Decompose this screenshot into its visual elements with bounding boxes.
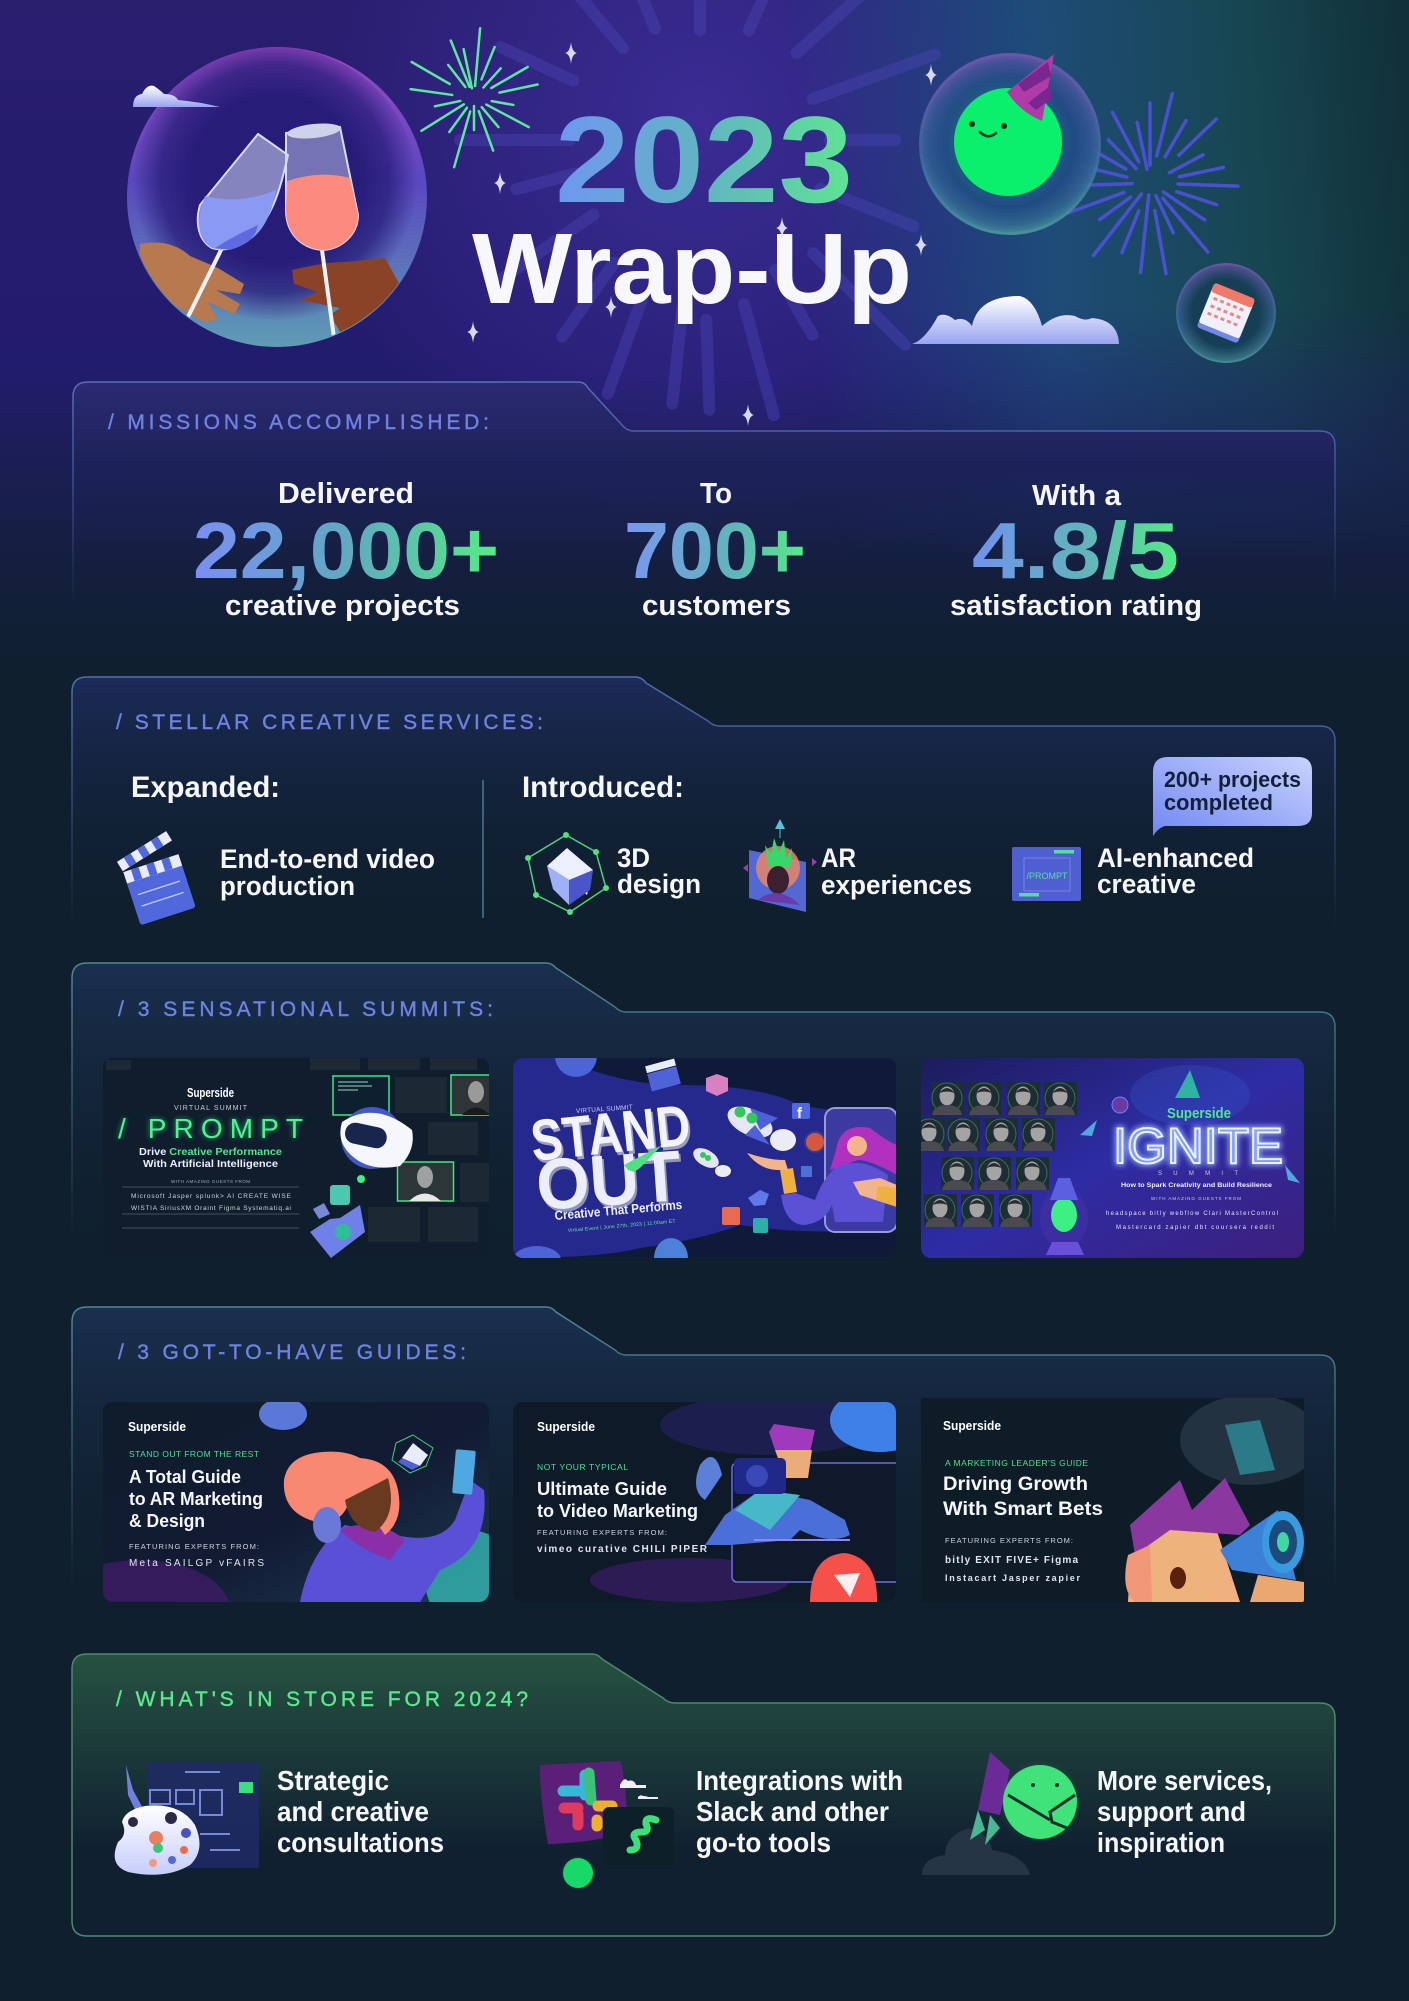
- card: AR guide: & Design: [129, 1511, 205, 1531]
- panel: missions accomplished: [73, 382, 1335, 622]
- big cloud: [912, 296, 1119, 344]
- card: video guide: NOT YOUR TYPICAL: [537, 1462, 628, 1472]
- card: AR guide: Meta SAILGP vFAIRS: [129, 1558, 264, 1569]
- text: more services: [1097, 1765, 1272, 1858]
- panel: stellar creative services: [72, 677, 1335, 930]
- card: stand out summit: OUT: [536, 1139, 686, 1229]
- title: 2023: 2023: [555, 92, 853, 229]
- card: ignite summit: IGNITE: [1113, 1118, 1283, 1174]
- stat: 22,000+ creative projects: [193, 478, 499, 622]
- card: stand out summit: f: [797, 1105, 803, 1122]
- card: AR guide: Superside: [128, 1419, 186, 1434]
- party hat: [1007, 54, 1054, 121]
- text: design: design: [617, 869, 701, 899]
- card: AR guide: to AR Marketing: [129, 1489, 263, 1509]
- text: end-to-end video: End-to-end video: [220, 844, 435, 874]
- stat: 4.8/5 satisfaction rating: 4.8/5: [972, 506, 1179, 595]
- card: prompt summit: WISTIA SiriusXM Oraint Figma Systematiq.ai: [131, 1205, 291, 1212]
- text: strategic and creative consultations: Strategic: [277, 1765, 389, 1796]
- heading: / 3 SENSATIONAL SUMMITS:: [118, 998, 493, 1021]
- card: video guide: vimeo curative CHILI PIPER: [537, 1544, 708, 1555]
- right glass: [286, 121, 358, 345]
- card: stand out summit: Creative That Performs: [554, 1197, 683, 1223]
- card: video guide: FEATURING EXPERTS FROM:: [537, 1528, 667, 1537]
- text: integrations: go-to tools: [696, 1827, 831, 1858]
- pirate: [1128, 1525, 1240, 1602]
- text: more services: support and: [1097, 1796, 1246, 1827]
- icon: AI creative card: [1012, 847, 1081, 901]
- sparkles: [467, 42, 937, 426]
- card: video guide: to Video Marketing: [537, 1501, 698, 1521]
- icon: AI creative card: /PROMPT: [1026, 871, 1068, 881]
- stat: 4.8/5 satisfaction rating: satisfaction rating: [950, 590, 1202, 622]
- stat: 700+ customers: [624, 478, 806, 622]
- divider: [482, 780, 484, 918]
- card: prompt summit: [103, 1058, 491, 1258]
- card: pirate guide: bitly EXIT FIVE+ Figma: [945, 1555, 1078, 1566]
- card: ignite summit: Mastercard zapier dbt coursera reddit: [1116, 1225, 1274, 1231]
- panel: what's in store for 2024: [72, 1654, 1335, 1936]
- card: prompt summit: With Artificial Intelligence: [143, 1158, 278, 1170]
- card: prompt summit: Drive Creative Performance: [139, 1146, 282, 1158]
- heading: / STELLAR CREATIVE SERVICES:: [116, 711, 543, 734]
- card: AR guide: STAND OUT FROM THE REST: [129, 1449, 259, 1459]
- card: ignite summit: headspace bitly webflow Clari MasterControl: [1106, 1211, 1278, 1217]
- panel: sensational summits: [72, 963, 1335, 1278]
- title: [472, 92, 912, 325]
- card: prompt summit: WITH AMAZING GUESTS FROM: [171, 1179, 250, 1184]
- card: ignite summit: IGNITE: [1113, 1118, 1283, 1174]
- stat: 700+ customers: 700+: [624, 506, 806, 595]
- card: prompt summit: / PROMPT: [118, 1113, 303, 1144]
- stat: 700+ customers: To: [700, 478, 732, 510]
- card: stand out summit: STAND: [530, 1096, 695, 1177]
- card: prompt summit: Superside: [187, 1085, 234, 1100]
- card: pirate guide: Driving Growth: [943, 1474, 1088, 1495]
- card: AR guide: [103, 1402, 489, 1602]
- text: strategic and creative consultations: [277, 1765, 444, 1858]
- card: pirate guide: With Smart Bets: [943, 1499, 1103, 1520]
- icon: 3D cube: [525, 832, 609, 915]
- text: strategic and creative consultations: consultations: [277, 1827, 444, 1858]
- text: 3D: 3D: [617, 843, 650, 873]
- small cloud: [133, 86, 220, 107]
- blue firework: [1060, 94, 1238, 274]
- card: video guide: Ultimate Guide: [537, 1479, 667, 1499]
- icon: clapperboard: [113, 830, 196, 926]
- text: integrations: Integrations with: [696, 1765, 903, 1796]
- green firework: [411, 28, 538, 167]
- card: prompt summit: / PROMPT: [118, 1113, 303, 1144]
- text: AI-enhanced: AI-enhanced: [1097, 843, 1254, 873]
- card: stand out summit: VIRTUAL SUMMIT: [576, 1104, 633, 1115]
- card: video guide: [513, 1402, 896, 1602]
- card: ignite summit: How to Spark Creativity and Build Resilience: [1121, 1182, 1272, 1189]
- card: stand out summit: Virtual Event | June 27th, 2023 | 11:00am ET: [568, 1219, 676, 1234]
- card: pirate guide: A MARKETING LEADER'S GUIDE: [945, 1458, 1088, 1468]
- person: [300, 1480, 485, 1602]
- card: prompt summit: Microsoft Jasper splunk> AI CREATE WISE: [131, 1193, 292, 1200]
- left hand: [138, 242, 244, 322]
- right hand: [292, 258, 399, 332]
- text: creative: creative: [1097, 869, 1196, 899]
- stat: 4.8/5 satisfaction rating: With a: [1032, 480, 1122, 512]
- card: pirate guide: [921, 1395, 1320, 1602]
- card: pirate guide: FEATURING EXPERTS FROM:: [945, 1536, 1073, 1545]
- callout: 200+ projects completed: [1153, 757, 1312, 836]
- panel: got-to-have guides: [71, 1306, 1336, 1602]
- illustration: toasting glasses bubble: [127, 47, 427, 347]
- left glass: [184, 134, 288, 325]
- card: ignite summit: SUMMIT: [1158, 1171, 1238, 1177]
- large background firework: [460, 0, 935, 415]
- card: ignite summit: [913, 1058, 1304, 1258]
- text: AR: AR: [821, 843, 856, 873]
- stat: 22,000+ creative projects: creative projects: [225, 590, 460, 622]
- icon: palette and flowchart: [115, 1762, 259, 1875]
- text: production: production: [220, 871, 355, 901]
- text: experiences: experiences: [821, 870, 972, 900]
- card: ignite summit: WITH AMAZING GUESTS FROM: [1151, 1196, 1241, 1201]
- subheading: introduced: Introduced:: [522, 771, 684, 804]
- heading: / WHAT'S IN STORE FOR 2024?: [116, 1688, 528, 1711]
- icon: AR portrait: [743, 819, 817, 912]
- card: AR guide: FEATURING EXPERTS FROM:: [129, 1542, 259, 1551]
- stat: 700+ customers: customers: [642, 590, 791, 622]
- heading: / 3 GOT-TO-HAVE GUIDES:: [118, 1341, 466, 1364]
- subheading: expanded: Expanded:: [131, 771, 280, 804]
- text: more services: inspiration: [1097, 1827, 1225, 1858]
- text: strategic and creative consultations: and creative: [277, 1796, 429, 1827]
- card: stand out summit: STAND: [528, 1093, 693, 1174]
- card: prompt summit: VIRTUAL SUMMIT: [174, 1105, 248, 1112]
- page background: [0, 0, 1409, 618]
- card: ignite summit: Superside: [1167, 1105, 1231, 1122]
- stat: 22,000+ creative projects: 22,000+: [193, 506, 499, 595]
- card: pirate guide: Instacart Jasper zapier: [945, 1573, 1080, 1583]
- stat: 4.8/5 satisfaction rating: [950, 480, 1202, 622]
- heading: / MISSIONS ACCOMPLISHED:: [108, 411, 489, 434]
- portraits grid: [913, 1082, 1077, 1227]
- illustration: green character with party hat: [919, 53, 1101, 235]
- card: stand out summit: OUT: [534, 1136, 684, 1226]
- card: AR guide: A Total Guide: [129, 1467, 241, 1487]
- illustration: calendar bubble: [1176, 263, 1276, 363]
- text: integrations: [696, 1765, 903, 1858]
- callout: 200+ projects completed: 200+ projects: [1164, 767, 1301, 792]
- stat: 22,000+ creative projects: Delivered: [278, 478, 414, 510]
- text: more services: More services,: [1097, 1765, 1272, 1796]
- icon: rocket character: [922, 1752, 1082, 1875]
- text: integrations: Slack and other: [696, 1796, 889, 1827]
- card: video guide: Superside: [537, 1419, 595, 1434]
- icon: slack and tools: [540, 1761, 674, 1891]
- callout: 200+ projects completed: completed: [1164, 790, 1273, 815]
- title: Wrap-Up: Wrap-Up: [472, 213, 912, 325]
- card: pirate guide: Superside: [943, 1418, 1001, 1433]
- card: stand out summit: [513, 1058, 896, 1258]
